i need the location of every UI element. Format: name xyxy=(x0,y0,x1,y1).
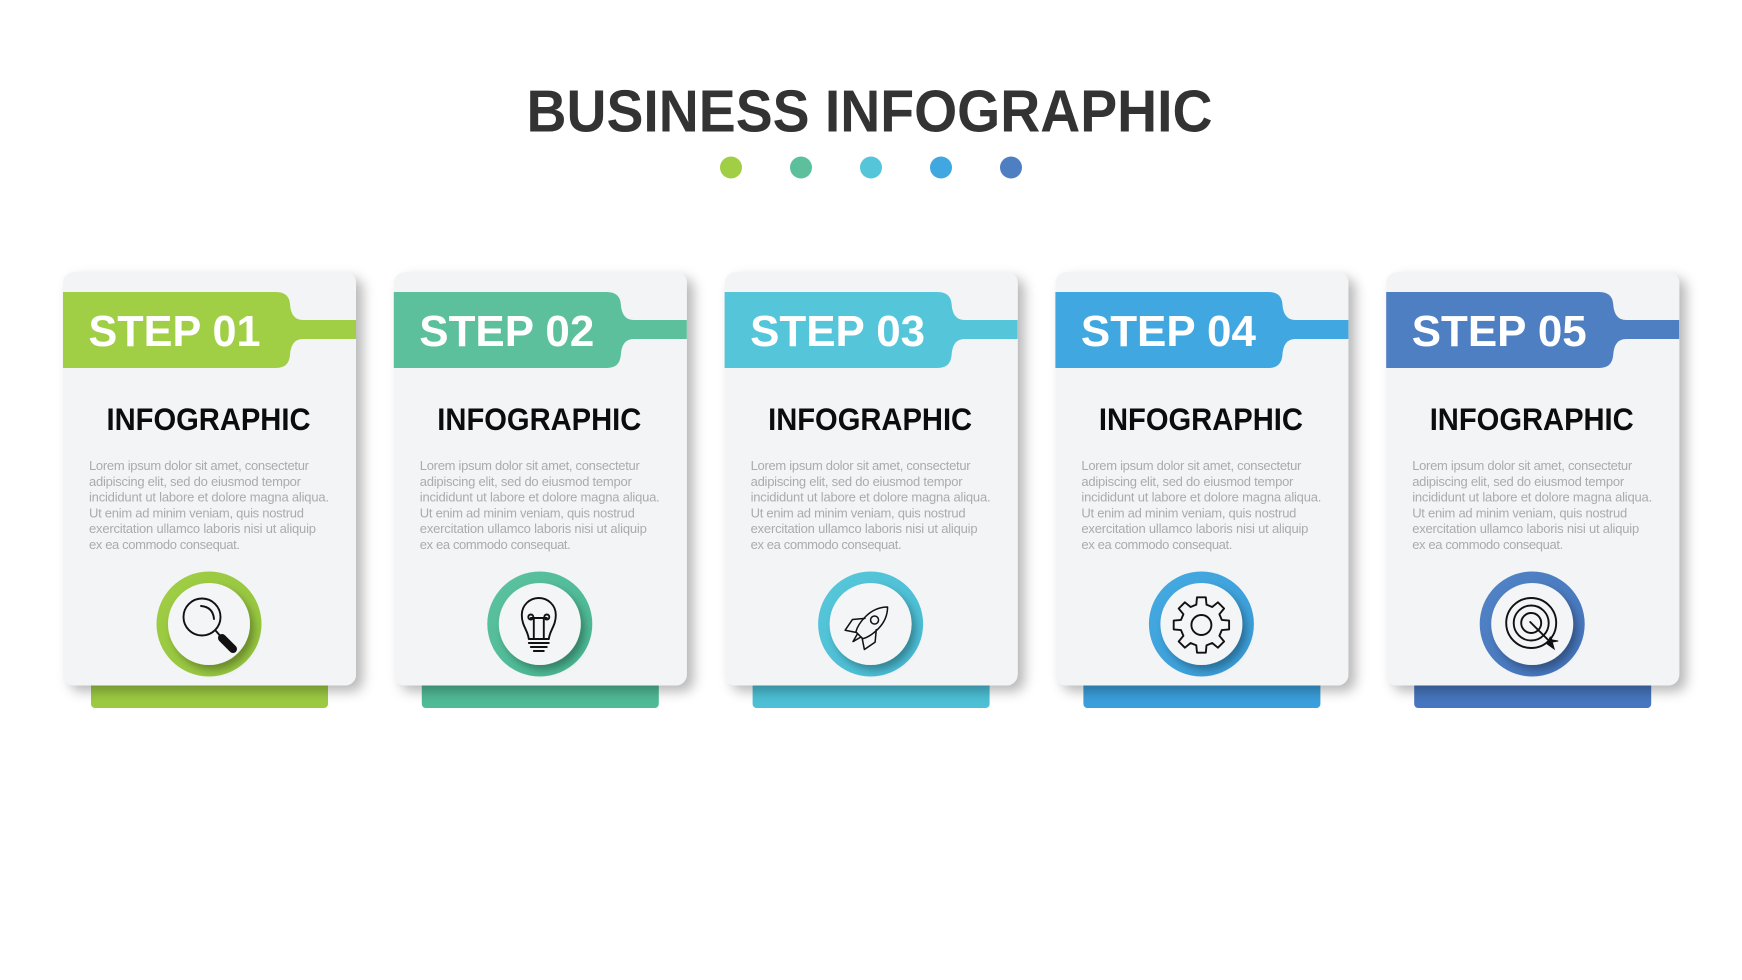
body text xyxy=(420,458,660,552)
body text: exercitation ullamco laboris nisi ut aliquip xyxy=(420,521,647,536)
heading: INFOGRAPHIC xyxy=(437,401,641,437)
body text: incididunt ut labore et dolore magna aliqua. xyxy=(751,490,991,505)
body text: incididunt ut labore et dolore magna aliqua. xyxy=(1412,490,1652,505)
heading: INFOGRAPHIC xyxy=(106,401,310,437)
panel: step 01 xyxy=(63,272,356,708)
step tab xyxy=(725,292,1018,368)
step label: STEP 03 xyxy=(750,307,925,356)
bottom bar xyxy=(753,670,990,708)
heading: INFOGRAPHIC xyxy=(768,401,972,437)
body text xyxy=(89,458,329,552)
heading: INFOGRAPHIC xyxy=(1430,401,1634,437)
icon: magnifying glass xyxy=(156,572,262,676)
body text: incididunt ut labore et dolore magna aliqua. xyxy=(89,490,329,505)
body text: Lorem ipsum dolor sit amet, consectetur xyxy=(1412,458,1633,473)
bottom bar xyxy=(91,670,328,708)
body text: adipiscing elit, sed do eiusmod tempor xyxy=(89,474,302,489)
body text: Ut enim ad minim veniam, quis nostrud xyxy=(89,505,304,520)
step tab xyxy=(1055,292,1348,368)
panel: step 02 xyxy=(394,272,687,708)
step tab xyxy=(394,292,687,368)
body text: Ut enim ad minim veniam, quis nostrud xyxy=(1412,505,1627,520)
step tab xyxy=(63,292,356,368)
body text xyxy=(1412,458,1652,552)
icon: gear xyxy=(1149,572,1254,676)
heading: INFOGRAPHIC xyxy=(1099,401,1303,437)
body text: Lorem ipsum dolor sit amet, consectetur xyxy=(420,458,640,473)
body text: exercitation ullamco laboris nisi ut aliquip xyxy=(1412,521,1639,536)
body text: Lorem ipsum dolor sit amet, consectetur xyxy=(1081,458,1302,473)
body text: exercitation ullamco laboris nisi ut aliquip xyxy=(1081,521,1308,536)
panel: step 04 xyxy=(1055,272,1348,708)
body text: adipiscing elit, sed do eiusmod tempor xyxy=(751,474,963,489)
body text: Ut enim ad minim veniam, quis nostrud xyxy=(751,505,966,520)
icon: target with arrow xyxy=(1480,572,1585,676)
step label: STEP 01 xyxy=(88,307,260,356)
body text: Ut enim ad minim veniam, quis nostrud xyxy=(1081,505,1296,520)
card xyxy=(1386,272,1679,686)
title: BUSINESS INFOGRAPHIC xyxy=(526,78,1212,144)
body text: adipiscing elit, sed do eiusmod tempor xyxy=(1412,474,1625,489)
body text: adipiscing elit, sed do eiusmod tempor xyxy=(1081,474,1294,489)
body text: Ut enim ad minim veniam, quis nostrud xyxy=(420,505,635,520)
icon: light bulb xyxy=(487,572,592,676)
icon: rocket xyxy=(818,572,923,676)
card xyxy=(63,272,356,686)
bottom bar xyxy=(1414,670,1651,708)
card xyxy=(725,272,1018,686)
body text: exercitation ullamco laboris nisi ut aliquip xyxy=(751,521,978,536)
body text: ex ea commodo consequat. xyxy=(1412,537,1563,552)
card xyxy=(1055,272,1348,686)
body text: incididunt ut labore et dolore magna aliqua. xyxy=(420,490,660,505)
panel: step 05 xyxy=(1386,272,1679,708)
body text: adipiscing elit, sed do eiusmod tempor xyxy=(420,474,632,489)
bottom bar xyxy=(422,670,659,708)
body text: ex ea commodo consequat. xyxy=(420,537,571,552)
card xyxy=(394,272,687,686)
step tab xyxy=(1386,292,1679,368)
colour dots row xyxy=(720,156,1022,178)
body text: exercitation ullamco laboris nisi ut aliquip xyxy=(89,521,316,536)
body text: ex ea commodo consequat. xyxy=(751,537,902,552)
body text xyxy=(751,458,991,552)
body text: Lorem ipsum dolor sit amet, consectetur xyxy=(751,458,971,473)
panel: step 03 xyxy=(725,272,1018,708)
step label: STEP 04 xyxy=(1081,307,1256,356)
body text: ex ea commodo consequat. xyxy=(1081,537,1232,552)
body text: Lorem ipsum dolor sit amet, consectetur xyxy=(89,458,310,473)
body text: ex ea commodo consequat. xyxy=(89,537,240,552)
step label: STEP 05 xyxy=(1412,307,1587,356)
body text xyxy=(1081,458,1321,552)
bottom bar xyxy=(1083,670,1320,708)
body text: incididunt ut labore et dolore magna aliqua. xyxy=(1081,490,1321,505)
step label: STEP 02 xyxy=(419,307,594,356)
